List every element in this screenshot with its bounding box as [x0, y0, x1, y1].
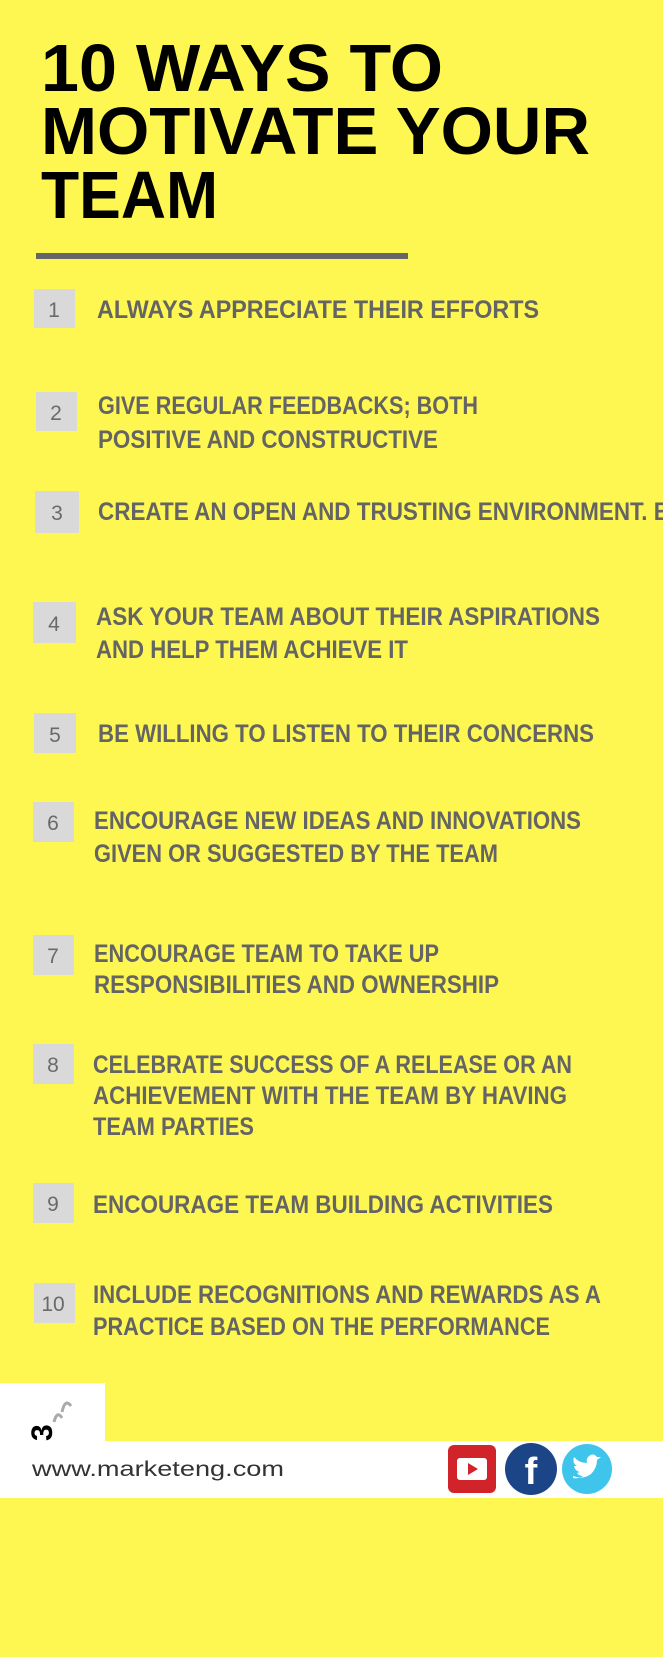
item 3 — [35, 491, 663, 533]
item 1 — [34, 289, 539, 328]
logo box: 3 — [26, 1424, 59, 1441]
item 6: 6 — [47, 812, 59, 835]
item 7 — [33, 935, 499, 999]
item 9: 9 — [47, 1193, 59, 1216]
icon: youtube — [448, 1445, 496, 1493]
item 8: TEAM PARTIES — [93, 1113, 254, 1141]
item 7: RESPONSIBILITIES AND OWNERSHIP — [94, 971, 499, 999]
title: TEAM — [41, 158, 218, 233]
website url: www.marketeng.com — [31, 1458, 284, 1481]
item 9: ENCOURAGE TEAM BUILDING ACTIVITIES — [93, 1191, 553, 1219]
item 2: GIVE REGULAR FEEDBACKS; BOTH — [98, 392, 478, 420]
item 1: 1 — [48, 299, 60, 322]
item 8: ACHIEVEMENT WITH THE TEAM BY HAVING — [93, 1082, 567, 1110]
item 3: 3 — [51, 502, 63, 525]
item 5: 5 — [49, 724, 61, 747]
item 10: PRACTICE BASED ON THE PERFORMANCE — [93, 1313, 550, 1341]
logo box — [0, 1383, 105, 1443]
item 7: 7 — [47, 945, 59, 968]
item 5: BE WILLING TO LISTEN TO THEIR CONCERNS — [98, 720, 594, 748]
item 2 — [36, 392, 478, 454]
icon: twitter — [562, 1444, 612, 1494]
item 10: INCLUDE RECOGNITIONS AND REWARDS AS A — [93, 1281, 601, 1309]
title — [41, 31, 590, 233]
icon: facebook — [505, 1443, 557, 1495]
item 4 — [33, 602, 600, 664]
item 4: ASK YOUR TEAM ABOUT THEIR ASPIRATIONS — [96, 603, 600, 631]
item 8: 8 — [47, 1054, 59, 1077]
item 2: 2 — [50, 402, 62, 425]
item 4: AND HELP THEM ACHIEVE IT — [96, 636, 408, 664]
item 6: ENCOURAGE NEW IDEAS AND INNOVATIONS — [94, 807, 581, 835]
item 8 — [33, 1044, 572, 1141]
item 8: CELEBRATE SUCCESS OF A RELEASE OR AN — [93, 1051, 572, 1079]
item 5 — [34, 713, 594, 753]
item 10 — [34, 1281, 601, 1341]
title: MOTIVATE YOUR — [41, 94, 590, 169]
item 4: 4 — [48, 613, 60, 636]
item 6: GIVEN OR SUGGESTED BY THE TEAM — [94, 840, 498, 868]
title: 10 WAYS TO — [41, 31, 443, 106]
icon: facebook: f — [525, 1451, 538, 1493]
item 9 — [33, 1183, 553, 1223]
item 7: ENCOURAGE TEAM TO TAKE UP — [94, 940, 439, 968]
item 10: 10 — [41, 1293, 65, 1316]
item 2: POSITIVE AND CONSTRUCTIVE — [98, 426, 438, 454]
item 1: ALWAYS APPRECIATE THEIR EFFORTS — [97, 296, 539, 324]
footer band — [0, 1441, 663, 1498]
item 6 — [33, 802, 581, 868]
